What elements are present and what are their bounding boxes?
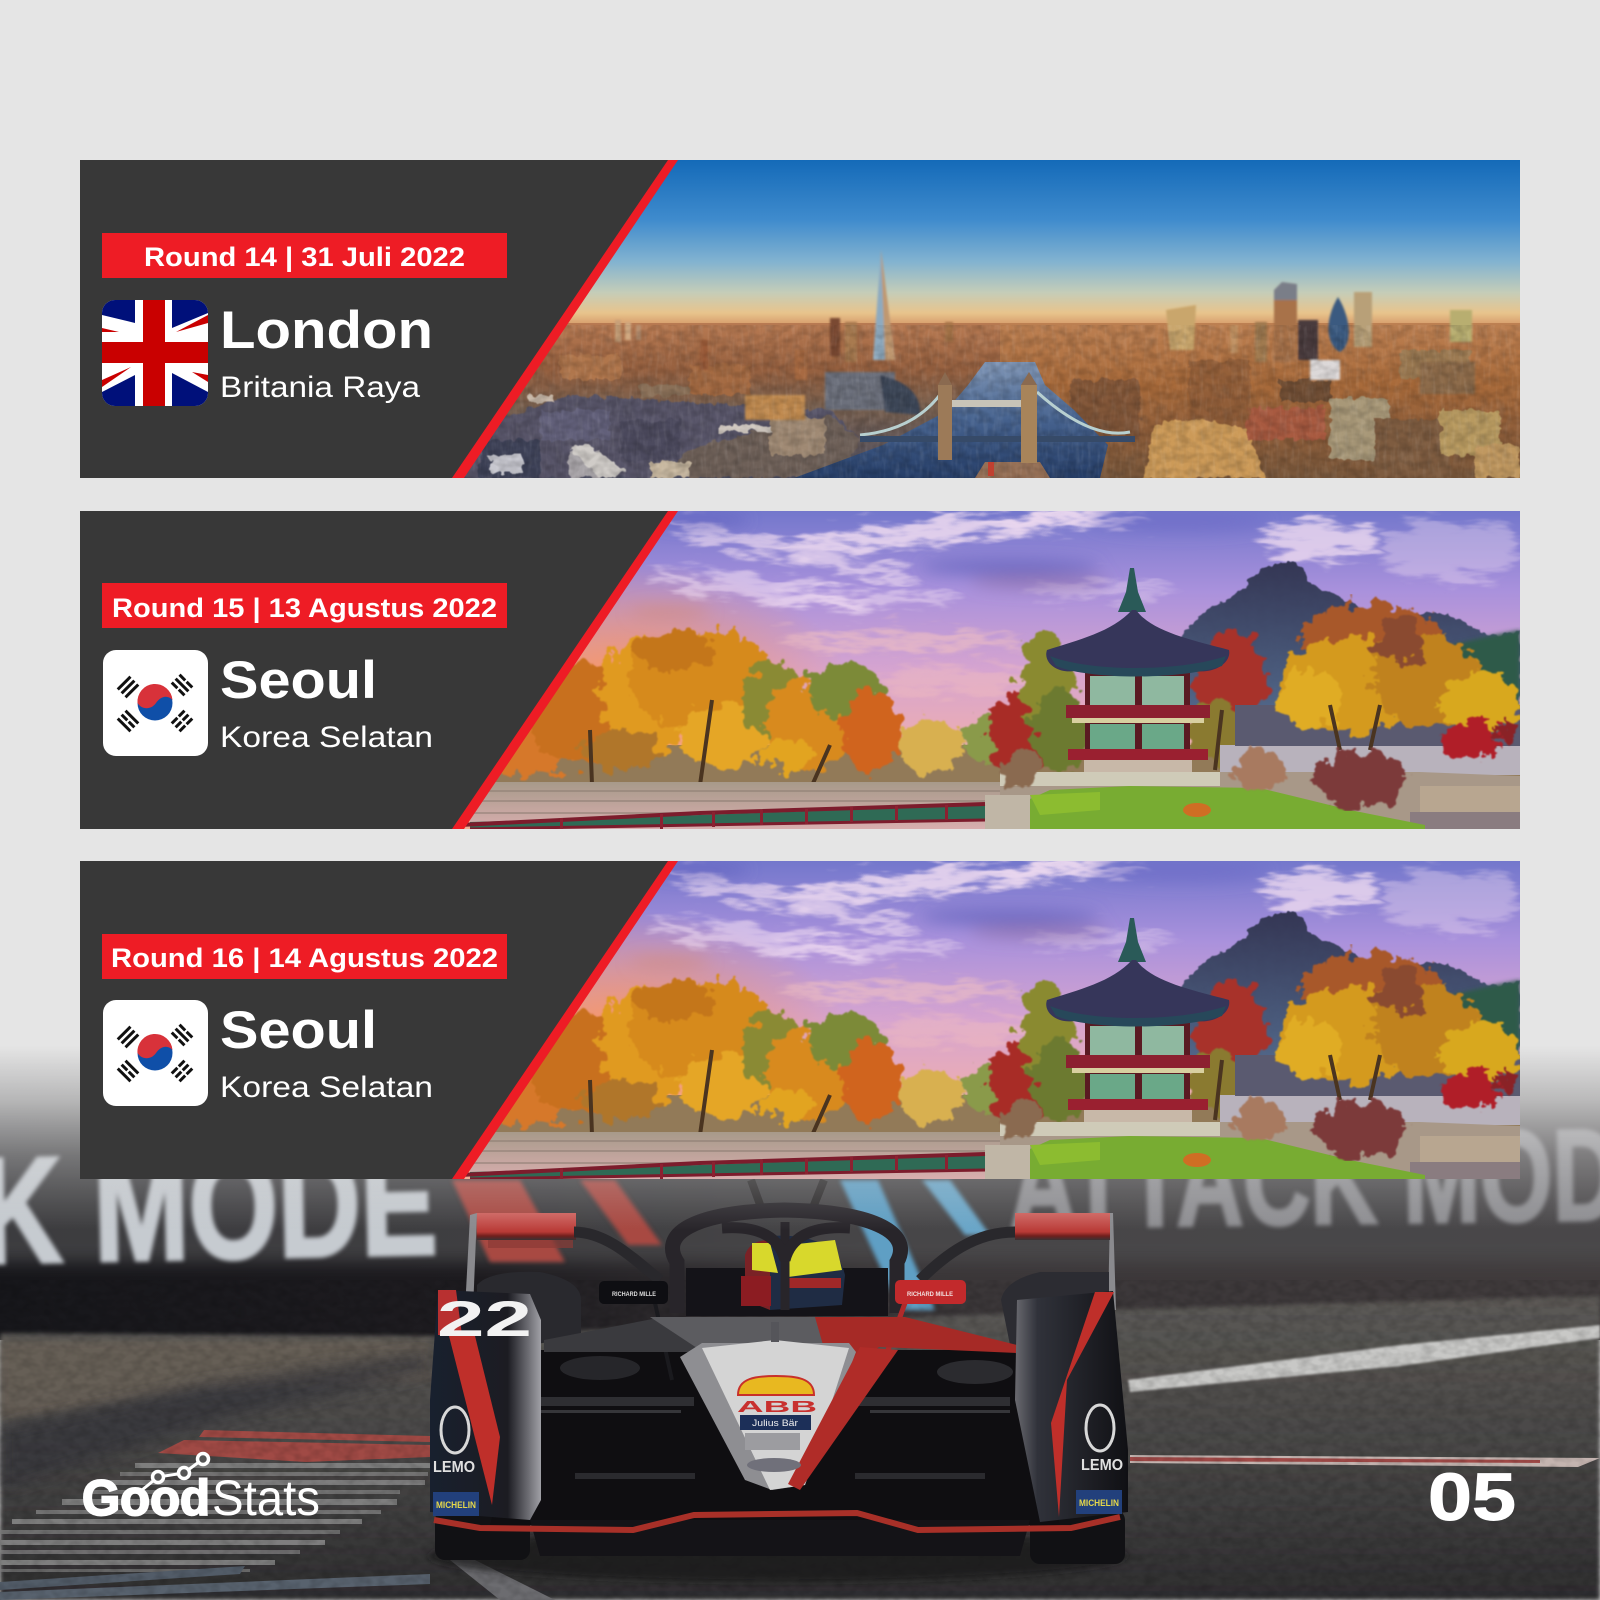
photo: London skyline: [440, 160, 1530, 478]
country: Korea Selatan: Korea Selatan: [220, 1071, 433, 1104]
panel: Round 16 Seoul: [80, 851, 1530, 1179]
mirrors: [599, 1280, 966, 1380]
left front wheel fairing: [430, 1290, 541, 1520]
right front wheel fairing: LEMO: [1081, 1457, 1123, 1474]
country: Britania Raya: Britania Raya: [220, 371, 420, 404]
date badge: Round 15: [102, 583, 507, 628]
Tower Bridge: [860, 372, 1135, 476]
diagonal red stripe: [452, 511, 678, 829]
icon: South Korea flag: [103, 1000, 208, 1106]
nose cone with sponsors: [680, 1322, 898, 1490]
left front wheel fairing: MICHELIN: [436, 1500, 476, 1510]
front wing: [434, 1513, 1120, 1530]
date badge: Round 14: [102, 233, 507, 278]
side pods: [477, 1272, 581, 1345]
right front wheel fairing: MICHELIN: [1079, 1498, 1119, 1508]
GoodStats logo: Stats: [212, 1470, 320, 1526]
road surface: [0, 1296, 1600, 1600]
river Thames: [794, 362, 1108, 478]
fade into page background: [0, 1000, 1600, 1230]
icon: South Korea flag: [103, 650, 208, 756]
grid-line markings on track: [0, 1463, 430, 1600]
city: Seoul: Seoul: [220, 1001, 377, 1060]
left front wheel fairing: 22: [437, 1291, 532, 1347]
central chassis: [490, 1350, 1060, 1525]
date badge: Round 15: Round 15 | 13 Agustus 2022: [112, 593, 497, 623]
city: London: London: [220, 301, 433, 360]
Formula E race car number 22: [428, 1180, 1128, 1582]
body shoulders: [544, 1317, 830, 1352]
date badge: Round 16: [102, 934, 507, 979]
photo: Gyeongbokgung pavilion in autumn: [464, 511, 1520, 829]
suspension arms: [541, 1356, 1013, 1479]
photo: Gyeongbokgung pavilion in autumn: [464, 861, 1520, 1179]
page number: 05: [1428, 1460, 1516, 1535]
cockpit and driver helmet: [686, 1236, 888, 1316]
pit wall with ATTACK MODE lettering: [0, 1040, 1600, 1340]
rear wing: [465, 1180, 1116, 1310]
right front wheel fairing: [1015, 1291, 1128, 1522]
nose cone with sponsors: Julius Bär: [752, 1418, 798, 1428]
panel: Round 15 Seoul: [80, 501, 1530, 829]
GoodStats logo: [82, 1454, 320, 1526]
background photo: race track with Formula E car: [0, 1000, 1600, 1600]
diagonal red stripe: [452, 160, 678, 478]
left front wheel fairing: LEMO: [433, 1459, 475, 1476]
GoodStats logo: Good: [82, 1470, 210, 1526]
date badge: Round 14: Round 14 | 31 Juli 2022: [144, 242, 465, 272]
city: Seoul: Seoul: [220, 651, 377, 710]
mirrors: RICHARD MILLE: [907, 1292, 953, 1298]
nose cone with sponsors: ABB: [737, 1399, 817, 1416]
date badge: Round 16: Round 16 | 14 Agustus 2022: [111, 943, 498, 973]
diagonal red stripe: [452, 861, 678, 1179]
country: Korea Selatan: Korea Selatan: [220, 721, 433, 754]
icon: UK flag: [102, 300, 208, 406]
halo: [672, 1210, 901, 1313]
mirrors: RICHARD MILLE: [612, 1292, 656, 1298]
panel: Round 14 London: [80, 160, 1530, 478]
